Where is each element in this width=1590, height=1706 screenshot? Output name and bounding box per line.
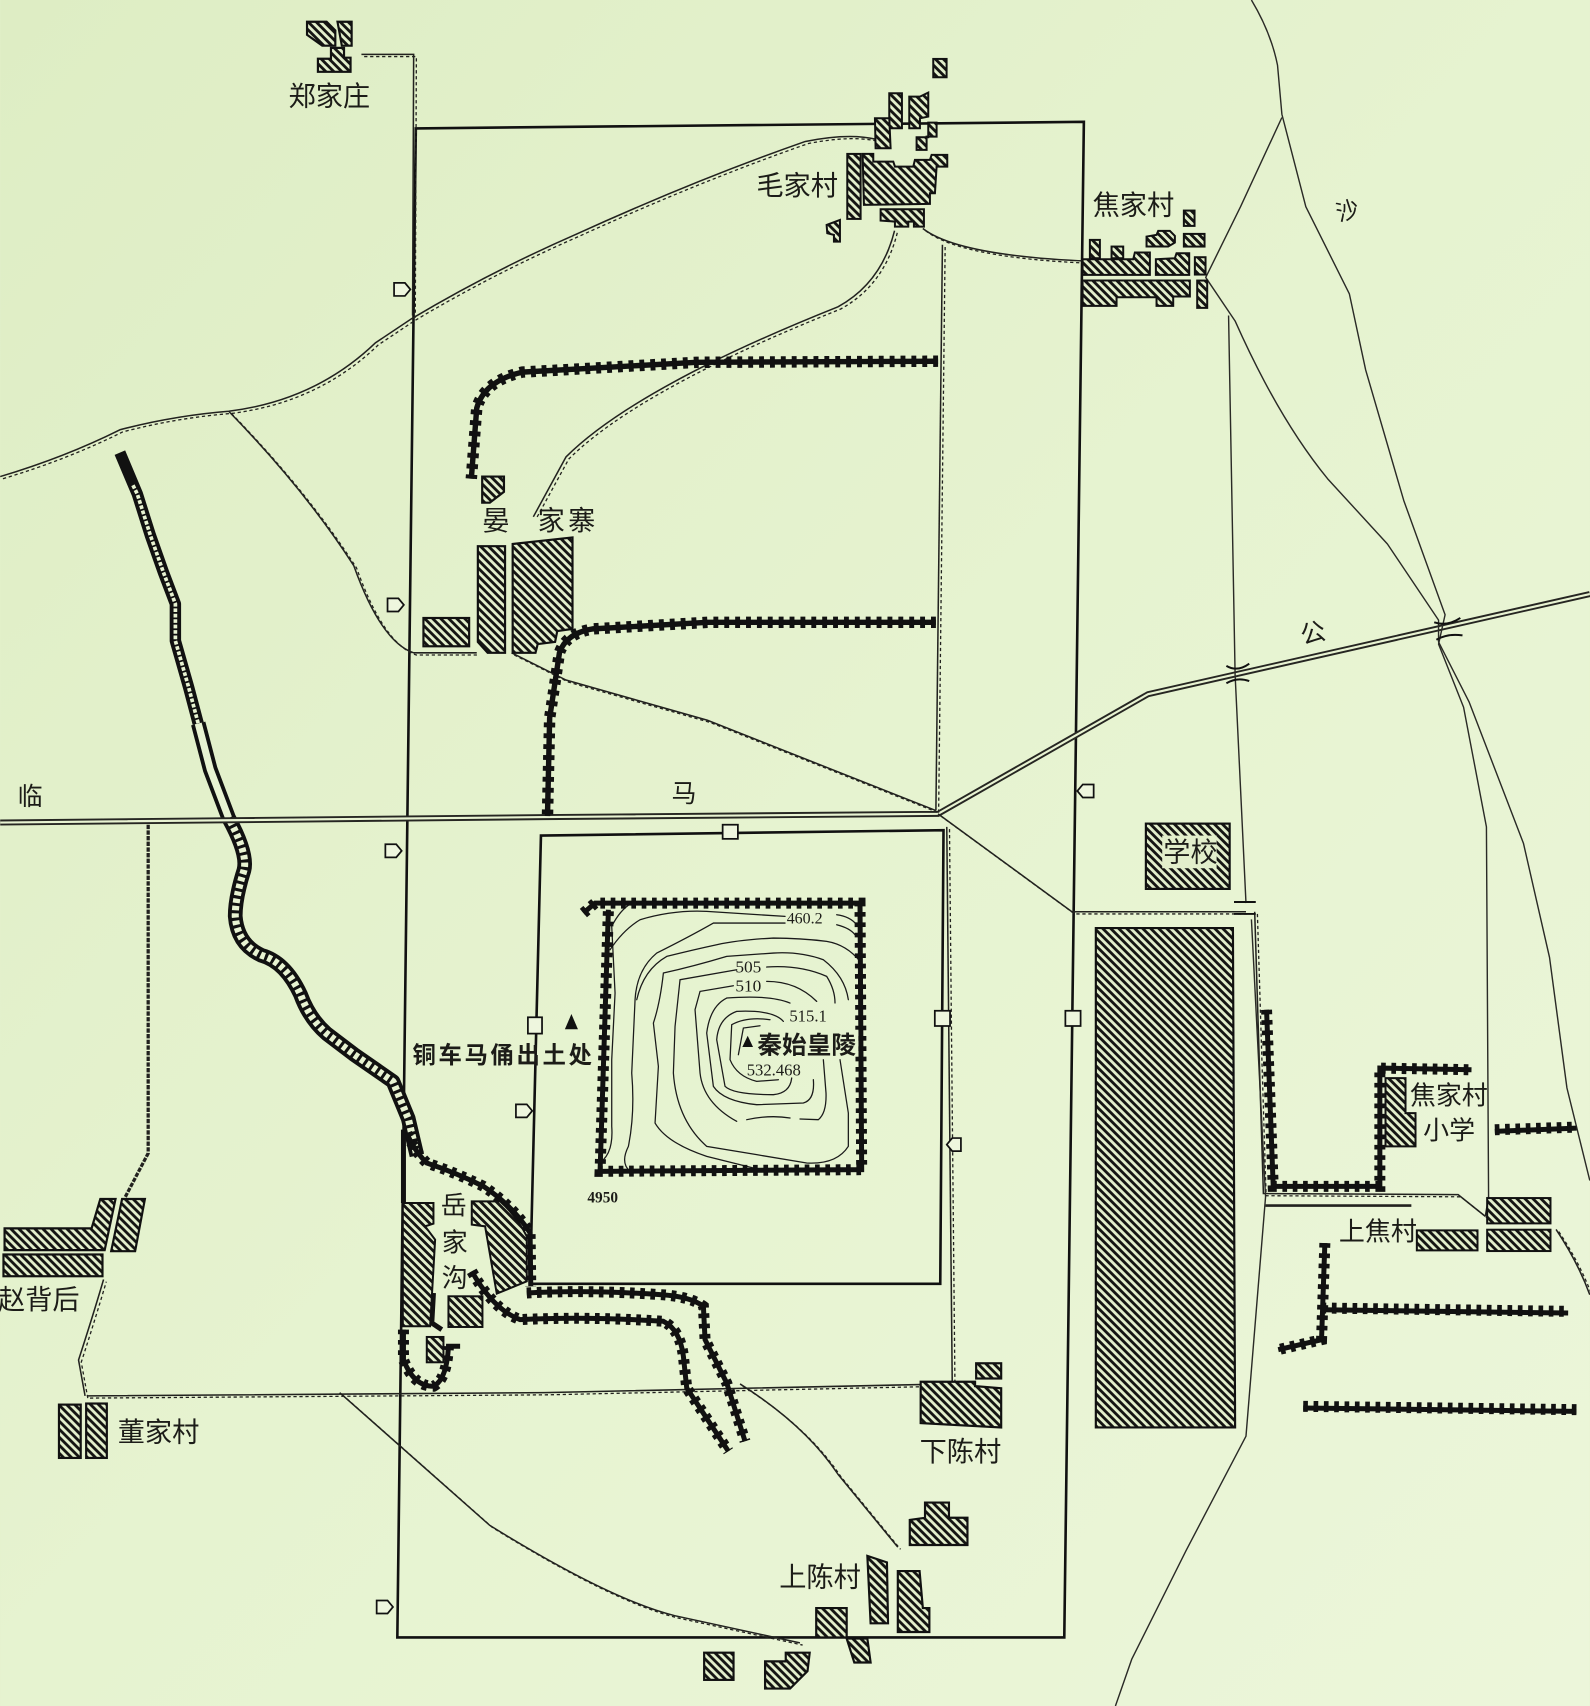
label: highway character Ma: 马 — [672, 780, 697, 808]
Yuejiagou detail — [403, 1130, 745, 1451]
label: highway character Gong: 公 — [1298, 617, 1329, 650]
label: Jiaojiacun primary school: 焦家村 — [1410, 1081, 1488, 1111]
label: Zhengjiazhuang: 郑家庄 — [289, 81, 370, 112]
label: Jiazhai: 家寨 — [538, 505, 599, 536]
school building — [1146, 824, 1230, 889]
village: Zhaobeihou — [3, 1199, 145, 1276]
label: Shangjiao village: 上焦村 — [1339, 1216, 1417, 1246]
sawtooth mound edge — [583, 903, 862, 1171]
elevation 505: 505 — [735, 957, 761, 976]
label backing: mausoleum name — [755, 1030, 858, 1056]
bridges — [1226, 618, 1462, 914]
label: Xiachencun: 下陈村 — [920, 1436, 1001, 1467]
label: highway character Lin: 临 — [18, 783, 43, 811]
gully west — [120, 453, 417, 1155]
field: terrace lines north — [471, 361, 938, 816]
label: river character Sha: 沙 — [1333, 195, 1362, 226]
Yuejiagou detail: 沟 — [442, 1263, 468, 1293]
label: school: 学校 — [1163, 837, 1218, 868]
villages: Maojiacun and Jiaojiacun buildings — [827, 59, 1207, 308]
label: bronze chariots excavation site: 铜车马俑出土处 — [413, 1042, 594, 1068]
label: primary school: 小学 — [1423, 1116, 1475, 1146]
peak triangle marker — [742, 1036, 753, 1047]
outer wall of the mausoleum — [397, 122, 1084, 1637]
Yuejiagou village buildings — [403, 1201, 527, 1362]
gate markers — [377, 283, 1094, 1614]
Yuejiagou detail: 家 — [442, 1227, 468, 1257]
elevation 4950: 4950 — [587, 1189, 618, 1206]
triangle marker: excavation site — [565, 1014, 578, 1029]
label: Jiaojiacun: 焦家村 — [1093, 189, 1174, 220]
village: Xiachencun — [921, 1363, 1001, 1427]
rivers: Sha river and streams — [1115, 0, 1590, 1706]
village: Yanjiazhai — [423, 477, 573, 653]
village: Dongjiacun — [59, 1404, 107, 1458]
Shangjiao village buildings — [1417, 1198, 1550, 1251]
label: Shangchencun: 上陈村 — [779, 1561, 861, 1592]
terraces east — [1267, 1010, 1576, 1411]
label: Qin Shi Huang mausoleum: 秦始皇陵 — [757, 1032, 856, 1060]
label: Yuejiagou: 岳 — [441, 1191, 467, 1221]
village: Zhengjiazhuang — [307, 22, 352, 72]
highway: Lintong to Mazhuang — [0, 594, 1590, 823]
label: Dongjiacun: 董家村 — [118, 1417, 199, 1448]
elevation 532.468: 532.468 — [747, 1061, 801, 1080]
elevation 515.1: 515.1 — [789, 1007, 827, 1026]
Jiaojiacun primary school building — [1386, 1078, 1416, 1146]
elevation 460.2: 460.2 — [787, 911, 823, 928]
label: Zhaobeihou: 赵背后 — [0, 1284, 80, 1315]
village: Shangchencun — [704, 1503, 967, 1689]
tomb mound with contours — [583, 903, 862, 1206]
inner wall of the mausoleum — [530, 830, 944, 1284]
elevation 510: 510 — [735, 976, 761, 995]
large hatched field — [1096, 928, 1235, 1427]
contour lines — [603, 903, 860, 1171]
label: Yan: 晏 — [482, 505, 509, 536]
label: Maojiacun: 毛家村 — [756, 170, 838, 201]
